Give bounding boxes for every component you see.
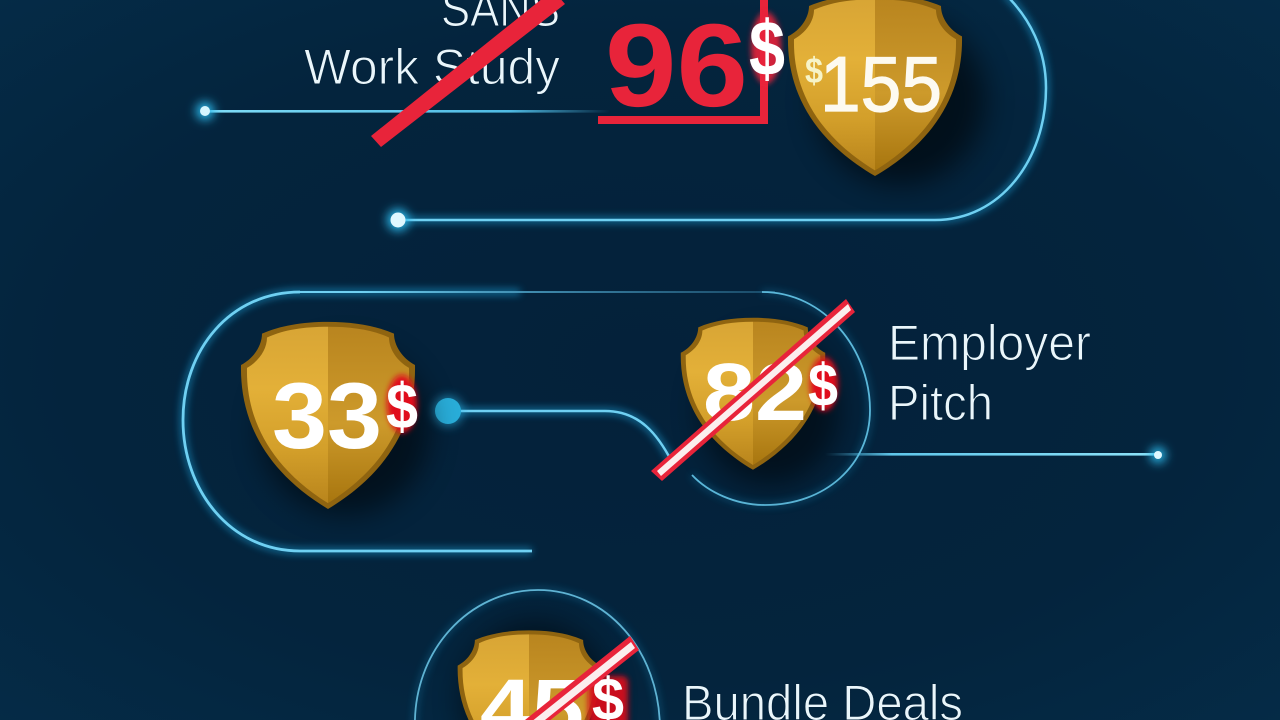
dot: connector node	[433, 396, 463, 426]
label: SANS Work Study	[304, 0, 560, 95]
shield: 82 dollars crossed out	[651, 299, 855, 485]
path: top left line	[205, 110, 610, 113]
shield: 33 dollars: $	[386, 370, 418, 442]
path: bottom ring around 45	[415, 590, 660, 720]
slash: 45	[500, 636, 639, 720]
path: middle outer loop	[183, 292, 775, 551]
dot: employer pitch node	[1150, 447, 1166, 463]
shield: 82 dollars crossed out: 82	[703, 347, 807, 438]
label: Employer Pitch: Pitch	[888, 375, 993, 431]
label: SANS Work Study: Work Study	[304, 39, 560, 95]
shield: 33 dollars	[241, 322, 430, 515]
shield: 155 dollars	[788, 0, 985, 185]
path: employer pitch line	[825, 453, 1158, 456]
red slash: work study	[371, 0, 565, 147]
price box: 96 dollars: $	[749, 4, 785, 92]
dot: top left node	[196, 102, 214, 120]
slash: 82	[651, 299, 855, 481]
shield: 155 dollars: 155	[820, 40, 942, 128]
label: Employer Pitch: Employer	[888, 315, 1091, 371]
path: connector from 33 to 82	[448, 411, 672, 462]
shield: 155 dollars: $	[805, 50, 823, 91]
path: middle ring around 82	[692, 292, 870, 505]
price box: 96 dollars: 96	[605, 0, 748, 132]
shield: 33 dollars: 33	[272, 363, 382, 468]
shield: 45 dollars crossed out	[458, 620, 639, 720]
label: Employer Pitch	[888, 315, 1091, 431]
path: top loop	[398, 0, 1046, 220]
dot: loop start node	[387, 209, 409, 231]
shield: 82 dollars crossed out: $	[808, 352, 838, 419]
